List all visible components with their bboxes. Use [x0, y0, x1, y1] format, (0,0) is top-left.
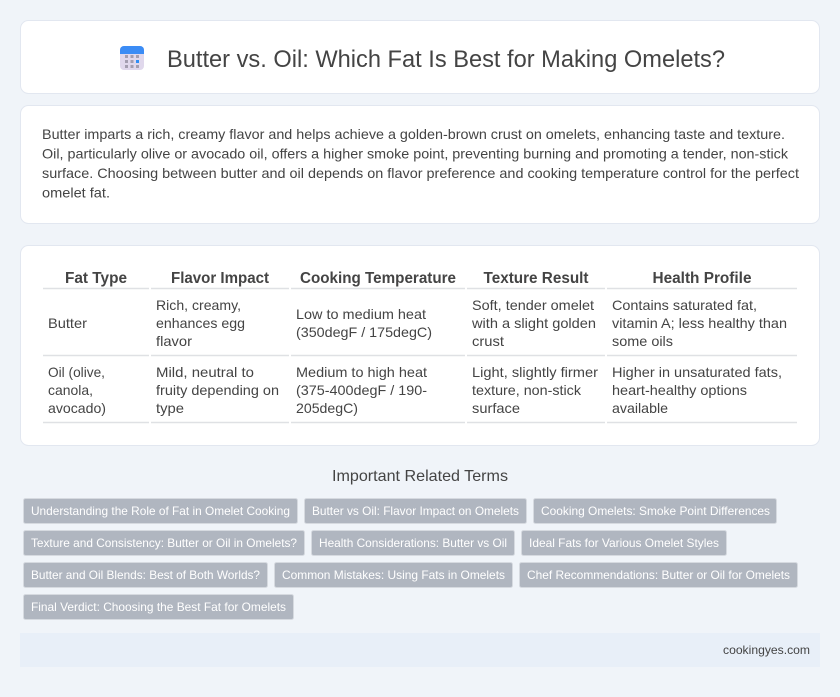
- row: oil: type: [156, 400, 184, 416]
- row: butter: [48, 297, 787, 349]
- row: butter: crust: [472, 333, 504, 349]
- footer: cookingyes.com: [723, 643, 810, 657]
- table header: Fat Type: [65, 270, 127, 287]
- tag list: Final Verdict: Choosing the Best Fat for Omelets: [31, 601, 286, 614]
- row: butter: flavor: [156, 333, 192, 349]
- table header: Texture Result: [484, 270, 588, 287]
- row: butter: enhances egg: [156, 315, 245, 331]
- row: oil: surface: [472, 400, 520, 416]
- intro text: Butter imparts a rich, creamy flavor and helps achieve a golden-brown crust on omelets, enhancing taste and texture.: [42, 126, 785, 142]
- tag list: Common Mistakes: Using Fats in Omelets: [282, 569, 505, 582]
- intro text: Oil, particularly olive or avocado oil, offers a higher smoke point, preventing burning and promoting a tender, non-stick: [42, 146, 789, 162]
- row: oil: Oil (olive,: [48, 364, 105, 380]
- tag list: Ideal Fats for Various Omelet Styles: [529, 537, 719, 550]
- tag list: [24, 498, 798, 620]
- row: oil: available: [612, 400, 668, 416]
- tag list: Health Considerations: Butter vs Oil: [319, 537, 507, 550]
- row: butter: Low to medium heat: [296, 306, 426, 322]
- row: butter: (350degF / 175degC): [296, 324, 432, 340]
- footer: [20, 633, 820, 667]
- row: oil: Medium to high heat: [296, 364, 427, 380]
- row: oil: Higher in unsaturated fats,: [612, 364, 782, 380]
- row: oil: texture, non-stick: [472, 382, 582, 398]
- row: butter: vitamin A; less healthy than: [612, 315, 787, 331]
- row: butter: some oils: [612, 333, 673, 349]
- row: oil: heart-healthy options: [612, 382, 747, 398]
- tag list: Butter and Oil Blends: Best of Both Worlds?: [31, 569, 260, 582]
- row: butter: Rich, creamy,: [156, 297, 241, 313]
- intro text: omelet fat.: [42, 184, 110, 200]
- table header: Cooking Temperature: [300, 270, 456, 287]
- icon: calendar: [120, 46, 144, 70]
- heading: Butter vs. Oil: Which Fat Is Best for Making Omelets?: [167, 46, 725, 73]
- panel: title: [20, 20, 820, 94]
- table header: Health Profile: [652, 270, 752, 287]
- table header: [65, 270, 752, 287]
- row: oil: canola,: [48, 382, 93, 398]
- row: oil: fruity depending on: [156, 382, 279, 398]
- tag list: Cooking Omelets: Smoke Point Differences: [541, 505, 770, 518]
- row: oil: 205degC): [296, 400, 358, 416]
- row: oil: [48, 364, 782, 416]
- row: butter: with a slight golden: [471, 315, 596, 331]
- row: butter: Soft, tender omelet: [472, 297, 594, 313]
- intro text: [42, 126, 799, 200]
- tag list: Understanding the Role of Fat in Omelet Cooking: [31, 505, 290, 518]
- panel: comparison table: [20, 246, 820, 446]
- panel: intro: [20, 106, 820, 224]
- row: oil: Mild, neutral to: [156, 364, 254, 380]
- table header: Flavor Impact: [171, 270, 269, 287]
- tag list: Texture and Consistency: Butter or Oil in Omelets?: [31, 537, 298, 550]
- tag list: Butter vs Oil: Flavor Impact on Omelets: [312, 505, 519, 518]
- tag list: Chef Recommendations: Butter or Oil for Omelets: [527, 569, 790, 582]
- row: butter: Contains saturated fat,: [612, 297, 757, 313]
- intro text: surface. Choosing between butter and oil depends on flavor preference and cooking temperature control for the perfect: [42, 165, 799, 181]
- row: butter: Butter: [48, 315, 87, 331]
- section heading: related terms: Important Related Terms: [332, 468, 508, 485]
- row: oil: (375-400degF / 190-: [296, 382, 427, 398]
- row: oil: avocado): [48, 400, 106, 416]
- row: oil: Light, slightly firmer: [472, 364, 598, 380]
